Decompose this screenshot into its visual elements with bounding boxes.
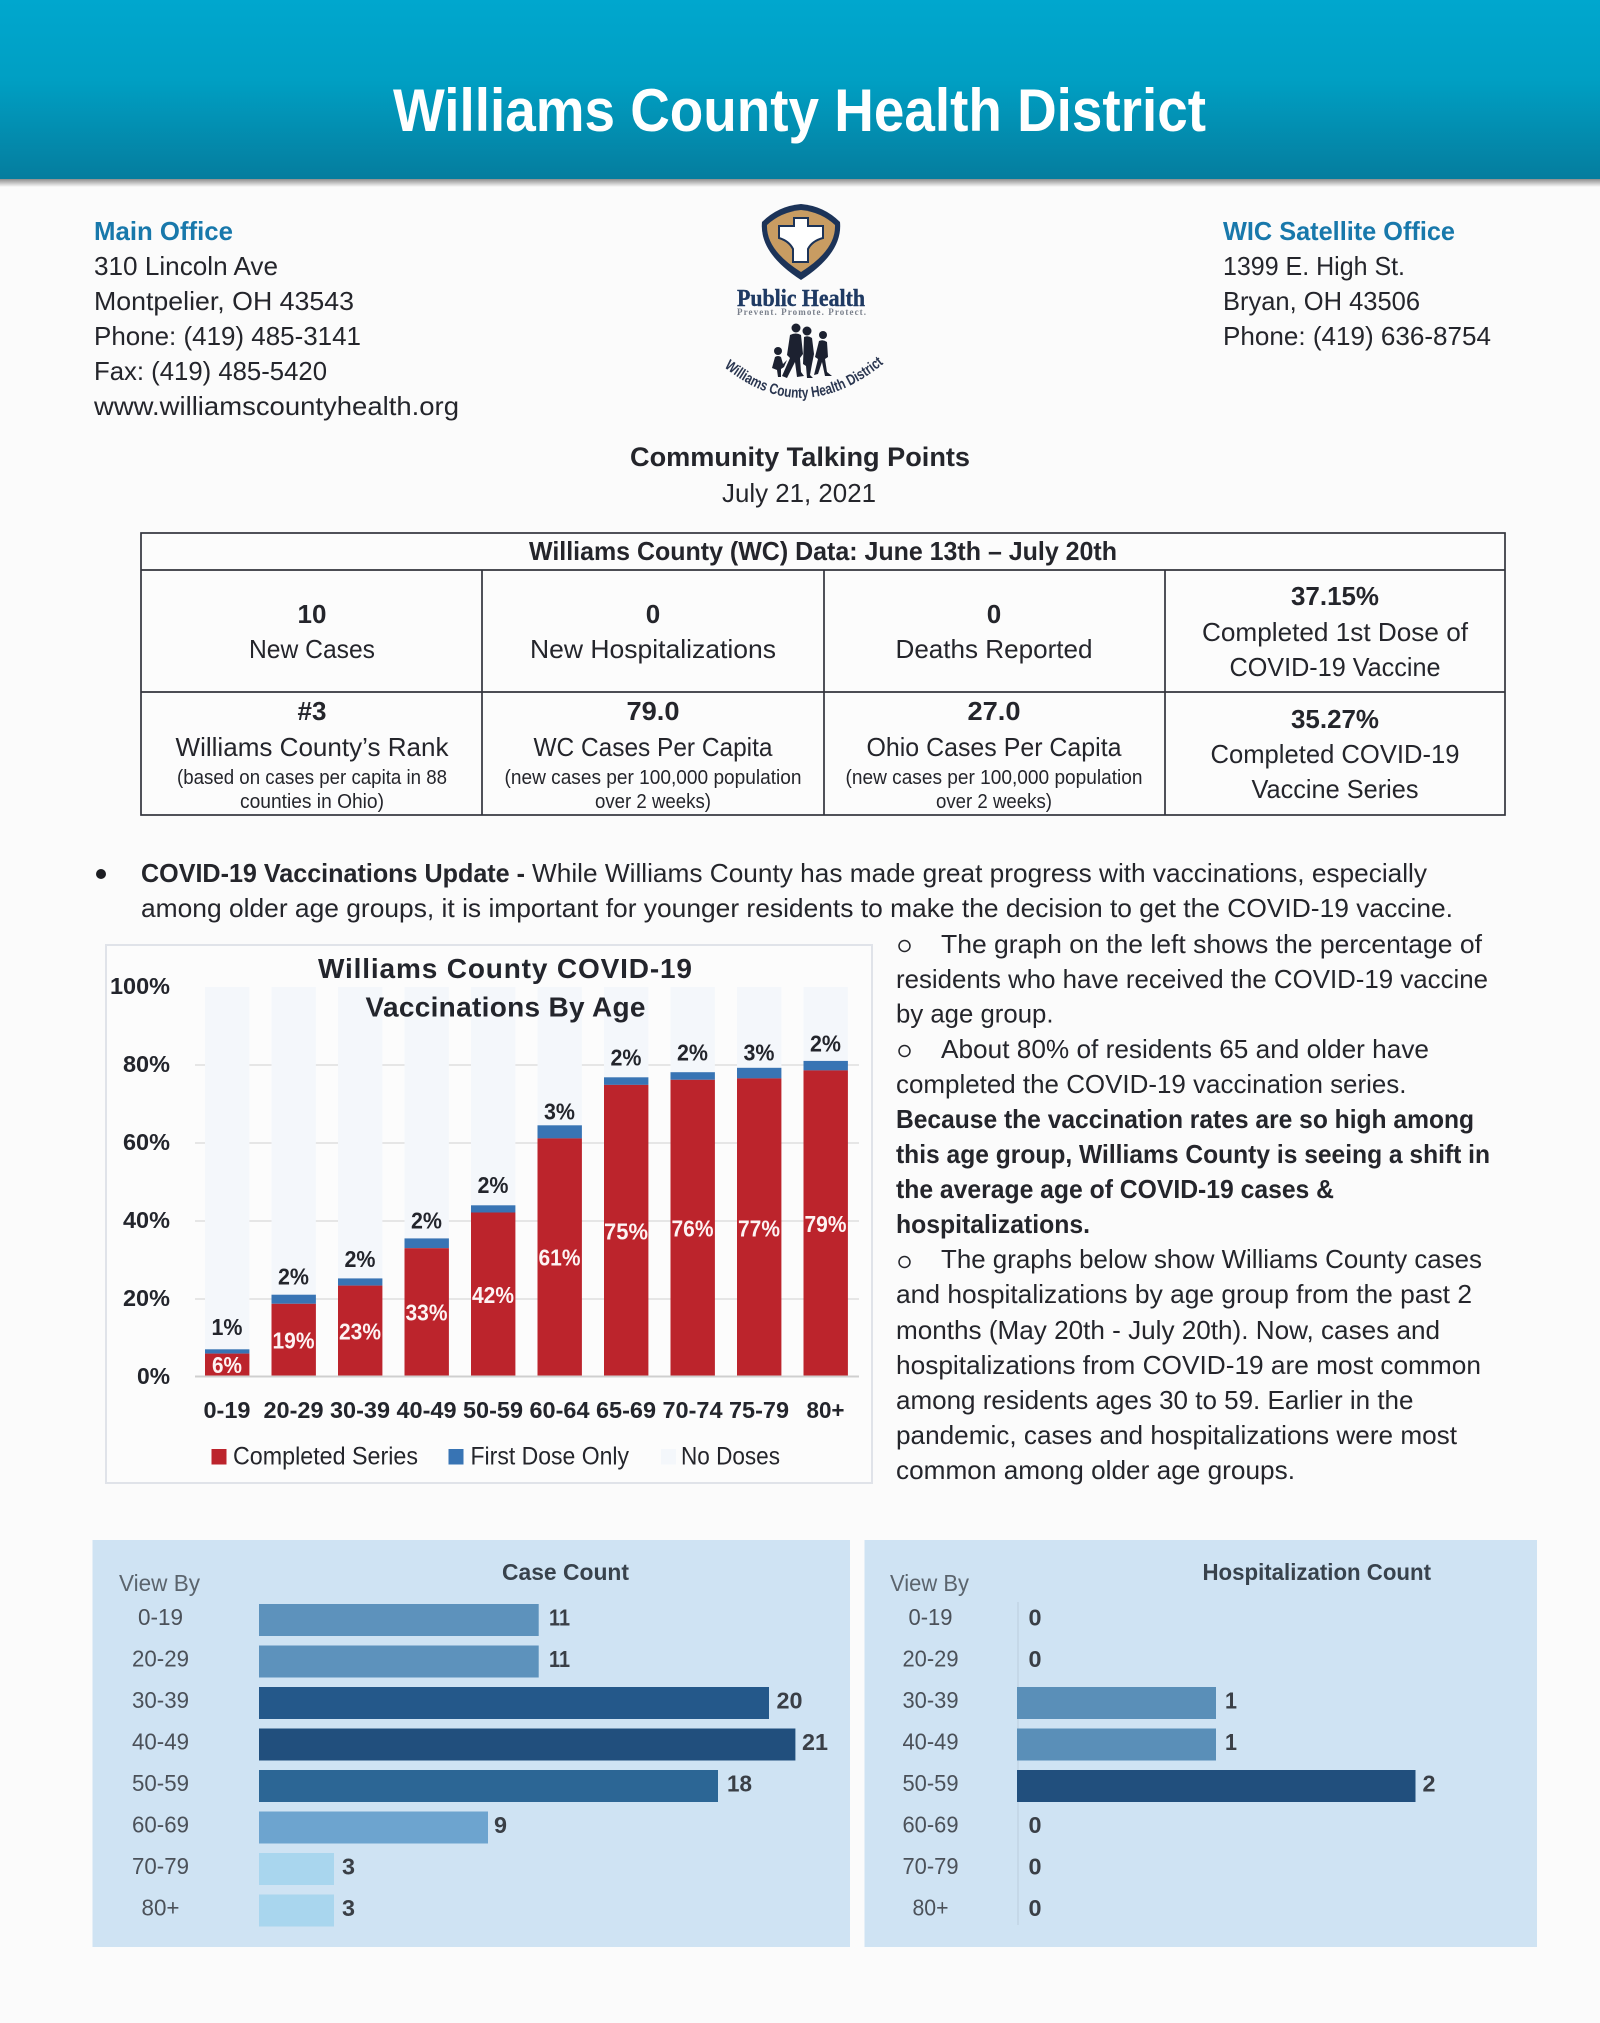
text block: graph commentary: The graph on the left shows the percentage of <box>941 929 1483 959</box>
cell: new cases: 10 <box>298 599 326 629</box>
cell: completed series <box>1210 704 1460 804</box>
completed series labels: 79% <box>804 1211 846 1237</box>
bullet: vaccinations update: among older age groups, it is important for younger residents to make the decision to get the COVID-19 vaccine. <box>141 893 1453 923</box>
age labels: 40-49 <box>132 1728 189 1754</box>
case values: 3 <box>342 1895 355 1921</box>
y axis labels: 80% <box>123 1051 170 1077</box>
text block: graph commentary: the average age of COVID-19 cases & <box>896 1174 1334 1204</box>
icon: family silhouette <box>772 324 832 378</box>
cell: WC cases per capita: (new cases per 100,000 population <box>504 767 802 789</box>
case bars <box>259 1604 795 1926</box>
chart legend: First Dose Only <box>470 1442 629 1470</box>
view by label: View By <box>119 1570 200 1596</box>
cell: county rank: (based on cases per capita in 88 <box>177 767 447 789</box>
case values: 18 <box>727 1770 752 1796</box>
chart title: Williams County COVID-19 <box>318 953 692 984</box>
first dose labels: 2% <box>610 1044 642 1070</box>
main office contact block: 310 Lincoln Ave <box>94 251 278 281</box>
chart legend <box>212 1442 780 1470</box>
first dose labels: 2% <box>278 1264 309 1290</box>
case values: 11 <box>549 1604 570 1630</box>
hospitalization values: 0 <box>1028 1604 1042 1630</box>
hospitalization values: 0 <box>1028 1812 1042 1838</box>
y axis labels: 60% <box>123 1129 170 1155</box>
cell: Ohio cases per capita <box>846 696 1142 813</box>
chart title: Vaccinations By Age <box>366 992 646 1022</box>
cell: WC cases per capita: WC Cases Per Capita <box>534 732 773 762</box>
panel: hospitalization count <box>864 1540 1537 1947</box>
WIC satellite office contact block: 1399 E. High St. <box>1223 251 1405 281</box>
logo: public health shield and family: Public Health <box>737 286 865 312</box>
first dose labels: 3% <box>744 1040 774 1066</box>
text block: graph commentary: About 80% of residents 65 and older have <box>941 1034 1429 1064</box>
table heading: Williams County (WC) Data: June 13th – July 20th <box>529 536 1117 566</box>
first dose labels: 2% <box>677 1040 708 1066</box>
y axis labels: 100% <box>110 973 170 999</box>
completed series labels: 42% <box>472 1282 514 1308</box>
first dose labels: 2% <box>411 1208 442 1234</box>
cell: WC cases per capita <box>504 696 802 813</box>
main office contact block <box>93 216 459 421</box>
hospitalization values: 1 <box>1225 1729 1237 1755</box>
y axis labels: 40% <box>123 1207 170 1233</box>
text block: graph commentary: The graphs below show Williams County cases <box>941 1244 1482 1274</box>
x axis labels: 30-39 <box>330 1397 390 1423</box>
chart: vaccinations by age <box>106 945 872 1483</box>
hospitalization values <box>1028 1604 1436 1921</box>
hospitalization values: 0 <box>1028 1646 1042 1672</box>
age labels: 80+ <box>912 1894 948 1920</box>
text block: graph commentary: months (May 20th - July 20th). Now, cases and <box>896 1315 1440 1345</box>
first dose only bars <box>205 1061 848 1354</box>
title: Williams County Health District <box>393 77 1206 144</box>
chart legend: Completed Series <box>233 1442 418 1470</box>
age labels: 30-39 <box>132 1687 189 1713</box>
completed series labels: 77% <box>738 1216 780 1242</box>
age labels <box>132 1604 189 1920</box>
cell: county rank <box>176 696 450 813</box>
cell: new cases <box>249 599 375 664</box>
icon: shield <box>762 204 840 280</box>
cell: Ohio cases per capita: (new cases per 100,000 population <box>846 767 1142 789</box>
text block: graph commentary: hospitalizations. <box>896 1209 1090 1239</box>
cell: Ohio cases per capita: Ohio Cases Per Capita <box>866 732 1122 762</box>
first dose labels: 2% <box>344 1246 376 1272</box>
x axis labels: 80+ <box>806 1397 844 1423</box>
text block: graph commentary: common among older age groups. <box>896 1455 1295 1485</box>
y axis labels <box>110 973 170 1389</box>
age labels: 0-19 <box>908 1604 952 1630</box>
bullet: vaccinations update: COVID-19 Vaccinations Update - <box>141 858 525 888</box>
cell: new hospitalizations: New Hospitalizations <box>530 634 776 664</box>
data table <box>141 533 1505 815</box>
x axis labels <box>204 1397 844 1423</box>
chart title <box>318 953 692 1022</box>
cell: first dose <box>1202 581 1469 682</box>
case values: 21 <box>802 1729 828 1755</box>
header banner <box>0 0 1600 187</box>
completed series labels: 33% <box>406 1300 448 1326</box>
cell: Ohio cases per capita: 27.0 <box>968 696 1020 726</box>
text block: graph commentary: pandemic, cases and hospitalizations were most <box>896 1420 1458 1450</box>
cell: completed series: Vaccine Series <box>1252 774 1418 804</box>
chart legend: No Doses <box>681 1442 780 1470</box>
WIC satellite office contact block: Bryan, OH 43506 <box>1223 286 1420 316</box>
age labels: 30-39 <box>902 1687 958 1713</box>
completed series labels: 75% <box>604 1218 648 1244</box>
heading: community talking points <box>630 442 970 508</box>
completed series labels: 76% <box>672 1216 714 1242</box>
first dose labels: 2% <box>478 1172 508 1198</box>
logo: public health shield and family: Prevent. Promote. Protect. <box>737 307 866 317</box>
text block: graph commentary: among residents ages 30 to 59. Earlier in the <box>896 1385 1414 1415</box>
cell: new hospitalizations: 0 <box>646 599 660 629</box>
age labels: 0-19 <box>138 1604 183 1630</box>
logo: public health shield and family: Williams County Health District <box>726 356 884 401</box>
case values <box>342 1604 828 1921</box>
cell: deaths reported <box>896 599 1092 664</box>
completed series labels: 23% <box>339 1318 381 1344</box>
text block: graph commentary: Because the vaccination rates are so high among <box>896 1104 1474 1134</box>
WIC satellite office contact block: WIC Satellite Office <box>1223 216 1455 246</box>
age labels: 70-79 <box>902 1853 958 1879</box>
first dose labels: 2% <box>810 1030 841 1056</box>
heading: community talking points: Community Talking Points <box>630 442 970 472</box>
cell: WC cases per capita: 79.0 <box>626 696 680 726</box>
WIC satellite office contact block <box>1223 216 1491 351</box>
logo: public health shield and family <box>726 204 884 401</box>
cell: completed series: Completed COVID-19 <box>1210 739 1460 769</box>
cell: first dose: Completed 1st Dose of <box>1202 617 1469 647</box>
completed series labels: 61% <box>538 1244 580 1270</box>
cell: new hospitalizations <box>530 599 776 664</box>
first dose labels <box>212 1030 841 1340</box>
hospitalization bars <box>1017 1687 1416 1802</box>
completed series bars <box>205 1070 848 1377</box>
x axis labels: 40-49 <box>396 1397 456 1423</box>
hospitalization values: 0 <box>1028 1895 1042 1921</box>
age labels: 60-69 <box>132 1812 189 1838</box>
age labels: 70-79 <box>132 1853 189 1879</box>
cell: completed series: 35.27% <box>1291 704 1379 734</box>
main office contact block: Fax: (419) 485-5420 <box>94 356 327 386</box>
text block: graph commentary: and hospitalizations by age group from the past 2 <box>896 1279 1472 1309</box>
first dose labels: 1% <box>212 1314 242 1340</box>
y axis labels: 20% <box>123 1285 170 1311</box>
cell: deaths reported: 0 <box>987 599 1001 629</box>
age labels: 20-29 <box>902 1646 958 1672</box>
heading: community talking points: July 21, 2021 <box>722 478 876 508</box>
text block: graph commentary: by age group. <box>896 998 1054 1028</box>
age labels: 80+ <box>142 1894 180 1920</box>
main office contact block: www.williamscountyhealth.org <box>93 391 459 421</box>
x axis labels: 20-29 <box>264 1397 324 1423</box>
cell: first dose: 37.15% <box>1291 581 1379 611</box>
cell: county rank: #3 <box>298 696 326 726</box>
age labels <box>902 1604 958 1920</box>
case values: 3 <box>342 1854 355 1880</box>
age labels: 50-59 <box>132 1770 189 1796</box>
hospitalization values: 0 <box>1028 1854 1042 1880</box>
no doses bars <box>205 987 848 1349</box>
age labels: 40-49 <box>902 1728 958 1754</box>
main office contact block: Phone: (419) 485-3141 <box>94 321 361 351</box>
cell: WC cases per capita: over 2 weeks) <box>595 791 711 813</box>
completed series labels <box>212 1211 846 1378</box>
WIC satellite office contact block: Phone: (419) 636-8754 <box>1223 321 1491 351</box>
text block: graph commentary <box>896 929 1490 1485</box>
cell: Ohio cases per capita: over 2 weeks) <box>936 791 1052 813</box>
x axis labels: 60-64 <box>530 1397 590 1423</box>
text block: graph commentary: completed the COVID-19 vaccination series. <box>896 1069 1406 1099</box>
cell: county rank: Williams County’s Rank <box>176 732 450 762</box>
text block: graph commentary: this age group, Williams County is seeing a shift in <box>896 1139 1490 1169</box>
x axis labels: 65-69 <box>596 1397 656 1423</box>
view by label: View By <box>890 1570 969 1596</box>
completed series labels: 6% <box>212 1352 242 1378</box>
x axis labels: 0-19 <box>204 1397 250 1423</box>
main office contact block: Montpelier, OH 43543 <box>94 286 354 316</box>
completed series labels: 19% <box>272 1328 314 1354</box>
age labels: 50-59 <box>902 1770 958 1796</box>
text block: graph commentary: residents who have received the COVID-19 vaccine <box>896 964 1488 994</box>
x axis labels: 75-79 <box>729 1397 789 1423</box>
bullet: vaccinations update <box>96 858 1453 923</box>
case count heading: Case Count <box>502 1559 629 1585</box>
text block: graph commentary: hospitalizations from COVID-19 are most common <box>896 1350 1481 1380</box>
cell: new cases: New Cases <box>249 634 375 664</box>
hospitalization values: 1 <box>1225 1688 1237 1714</box>
y axis labels: 0% <box>137 1363 170 1389</box>
x axis labels: 70-74 <box>662 1397 723 1423</box>
panel: case count <box>92 1540 850 1947</box>
main office contact block: Main Office <box>94 216 233 246</box>
hospitalization heading: Hospitalization Count <box>1202 1559 1431 1585</box>
age labels: 20-29 <box>132 1646 189 1672</box>
case values: 11 <box>549 1646 570 1672</box>
hospitalization values: 2 <box>1422 1770 1436 1796</box>
cell: first dose: COVID-19 Vaccine <box>1230 652 1440 682</box>
first dose labels: 3% <box>544 1098 575 1124</box>
cell: county rank: counties in Ohio) <box>240 791 384 813</box>
x axis labels: 50-59 <box>463 1397 523 1423</box>
age labels: 60-69 <box>902 1812 958 1838</box>
case values: 9 <box>494 1812 507 1838</box>
cell: deaths reported: Deaths Reported <box>896 634 1092 664</box>
case values: 20 <box>776 1688 802 1714</box>
bullet: vaccinations update: While Williams County has made great progress with vaccinations, especially <box>532 858 1427 888</box>
